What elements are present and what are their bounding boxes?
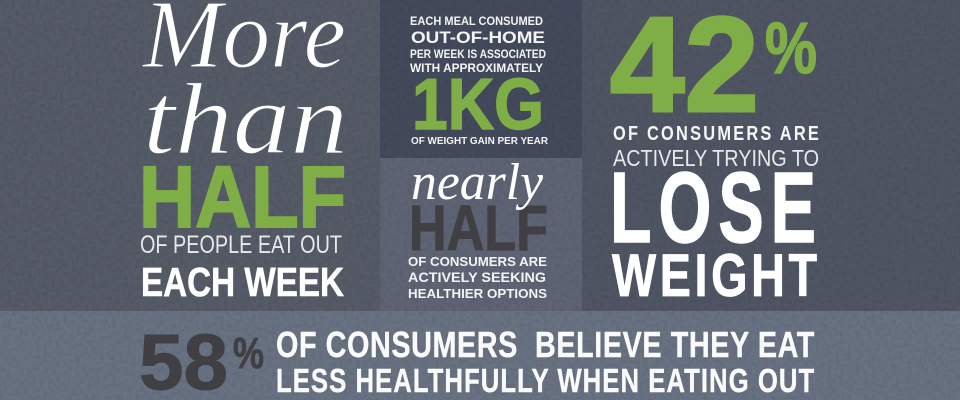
text: seeking healthier options: ACTIVELY SEEKING	[408, 270, 546, 285]
text: each week: EACH WEEK	[141, 259, 344, 305]
panel: one kilogram	[380, 0, 582, 158]
panel: more than half	[0, 0, 380, 311]
text: seeking healthier options: HEALTHIER OPTIONS	[408, 286, 547, 301]
stat: percent sign: %	[233, 329, 264, 378]
text: seeking healthier options: OF CONSUMERS ARE	[408, 254, 547, 269]
stat: percent sign: %	[765, 9, 817, 89]
heading: nearly: nearly	[411, 154, 544, 211]
heading: more than: than	[143, 63, 348, 176]
text: meal statement: OUT-OF-HOME	[411, 28, 545, 47]
heading: weight: WEIGHT	[612, 242, 817, 309]
text: meal statement: EACH MEAL CONSUMED	[410, 16, 543, 28]
text: of people eat out: OF PEOPLE EAT OUT	[140, 231, 342, 259]
text: of consumers are: OF CONSUMERS ARE	[613, 121, 819, 144]
text: actively trying to: ACTIVELY TRYING TO	[613, 145, 819, 171]
panel: nearly half	[380, 154, 582, 311]
panel: 58 percent	[0, 311, 960, 400]
text: meal statement: WITH APPROXIMATELY	[410, 63, 543, 75]
heading: half: HALF	[409, 192, 548, 264]
heading: half: HALF	[139, 149, 346, 246]
stat: 1kg: 1KG	[412, 65, 544, 145]
panel: 42 percent	[582, 0, 960, 311]
text: meal statement: PER WEEK IS ASSOCIATED	[410, 49, 546, 61]
text: weight gain: OF WEIGHT GAIN PER YEAR	[411, 135, 548, 147]
heading: lose: LOSE	[610, 153, 816, 264]
heading: more than	[141, 0, 348, 176]
text: seeking healthier options	[408, 254, 547, 301]
text: believe they eat: OF CONSUMERS BELIEVE THEY EAT	[276, 324, 814, 365]
text: less healthfully: LESS HEALTHFULLY WHEN EATING OUT	[276, 363, 814, 400]
text: meal statement	[410, 16, 546, 75]
